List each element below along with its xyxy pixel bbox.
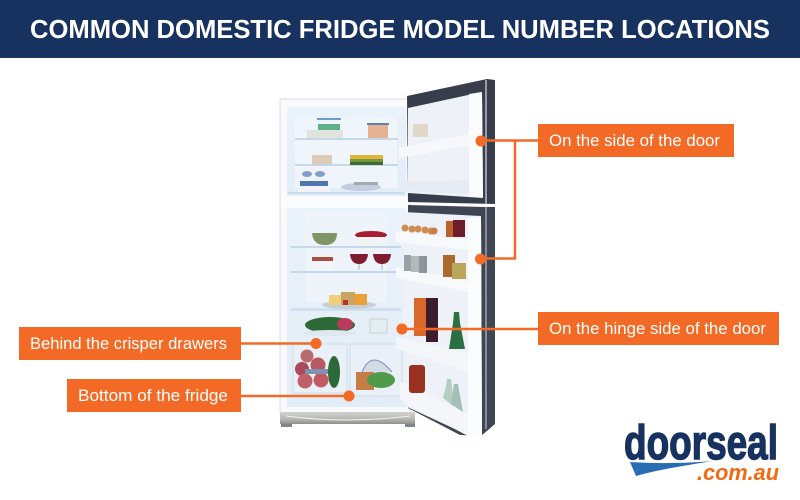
callout: hinge side of the door bbox=[396, 312, 779, 345]
logo domain: .com.au bbox=[697, 460, 780, 485]
label: crisper drawers bbox=[19, 327, 241, 360]
label: hinge side bbox=[538, 312, 779, 345]
callout: behind the crisper drawers bbox=[19, 327, 322, 360]
title: COMMON DOMESTIC FRIDGE MODEL NUMBER LOCATIONS bbox=[30, 14, 770, 44]
title banner bbox=[0, 0, 800, 58]
logo: doorseal.com.au bbox=[624, 417, 780, 485]
fridge illustration bbox=[280, 79, 495, 437]
label: fridge bottom: Bottom of the fridge bbox=[78, 387, 228, 405]
marker: upper door side bbox=[476, 136, 486, 146]
open door upper bbox=[399, 79, 495, 204]
crisper drawers bbox=[293, 344, 402, 396]
label: hinge side: On the hinge side of the door bbox=[549, 320, 767, 338]
label: side of the door: On the side of the door bbox=[549, 132, 720, 150]
logo swoosh bbox=[630, 461, 712, 476]
marker: crisper drawers bbox=[310, 338, 322, 349]
marker: hinge side bbox=[396, 324, 408, 334]
fridge cabinet bbox=[280, 99, 410, 413]
callout: bottom of the fridge bbox=[67, 379, 354, 412]
fridge shelves and food bbox=[291, 231, 401, 336]
label: crisper drawers: Behind the crisper drawers bbox=[30, 335, 227, 353]
marker: lower door side bbox=[475, 254, 486, 264]
callout: side of the door bbox=[475, 124, 734, 264]
label: fridge bottom bbox=[67, 379, 241, 412]
label: side of the door bbox=[538, 124, 734, 157]
freezer shelves and food bbox=[288, 118, 404, 194]
marker: fridge bottom bbox=[344, 390, 354, 402]
fridge base bbox=[280, 412, 415, 427]
open door lower bbox=[395, 205, 495, 437]
